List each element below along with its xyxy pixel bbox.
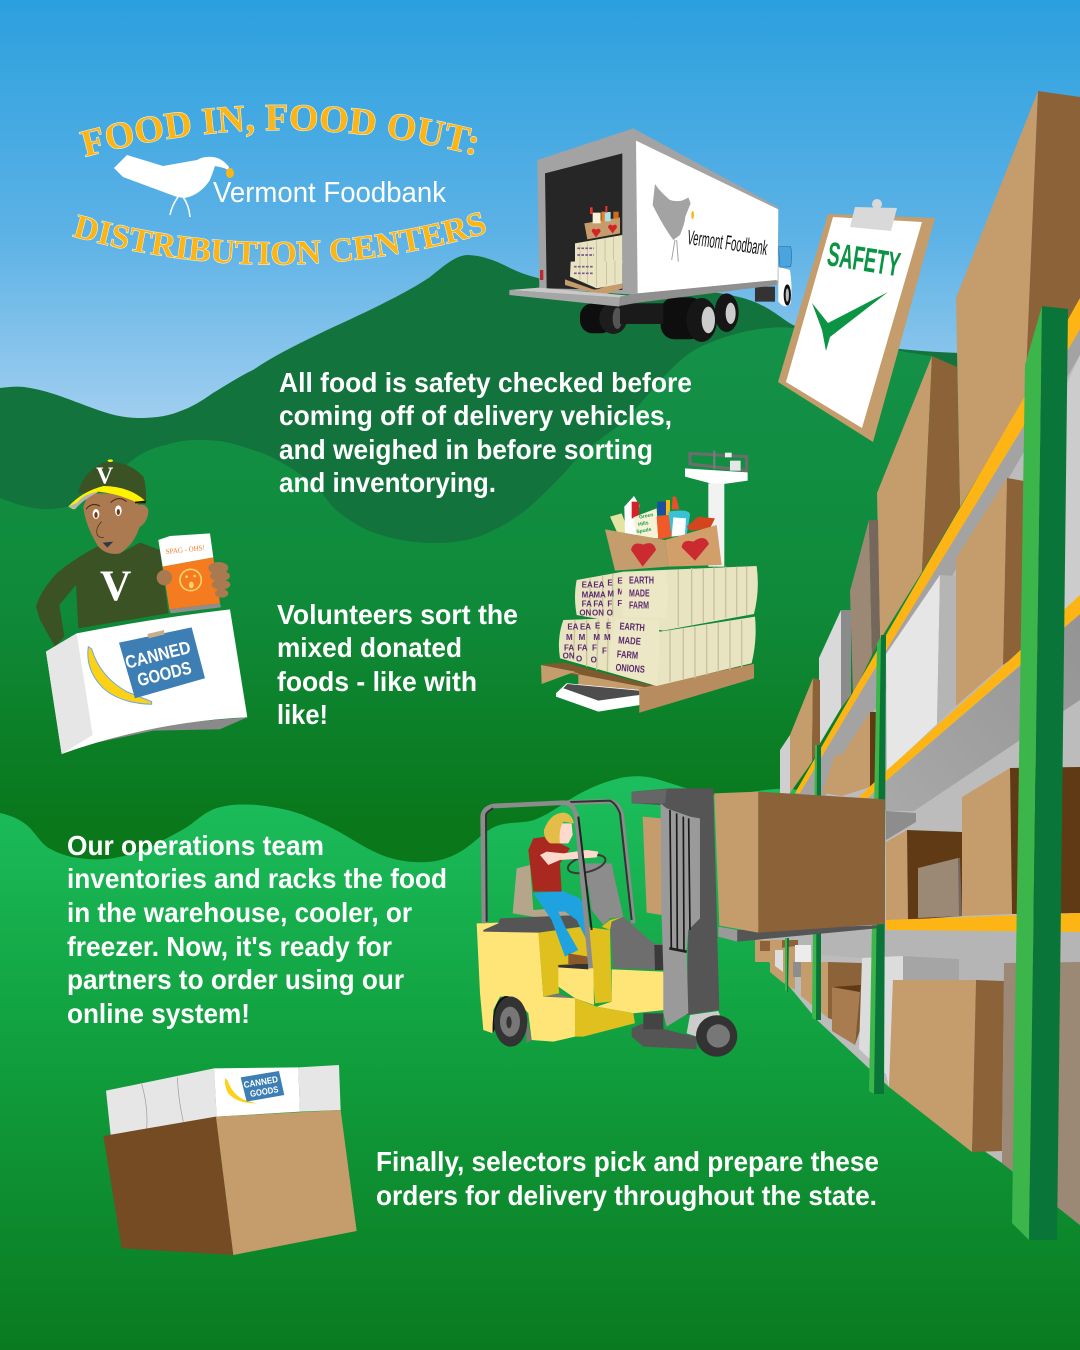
delivery truck: Vermont Foodbank: [686, 226, 769, 260]
sacks lower stack: EA: [567, 622, 579, 631]
big tan box level two: [962, 767, 1080, 916]
canned goods label: GOODS: [135, 658, 193, 690]
sacks lower stack: MADE: [618, 635, 641, 648]
pallet: [541, 663, 754, 713]
paragraph: operations team: inventories and racks the food: [67, 863, 447, 894]
sacks upper stack: FA: [582, 600, 592, 609]
sacks upper stack: F: [617, 599, 622, 608]
pallet in truck: [565, 206, 622, 298]
box with hearts: [605, 525, 722, 571]
paragraph: volunteers sort: like!: [277, 699, 328, 730]
sacks lower stack: F: [602, 646, 607, 655]
sacks upper stack: EA: [582, 580, 593, 589]
paragraph: volunteers sort: Volunteers sort the: [277, 599, 518, 630]
paragraph: safety checks: [279, 367, 692, 498]
bottom canned goods carton: [103, 1065, 357, 1255]
delivery truck: [509, 128, 792, 342]
sacks lower stack: M: [593, 633, 600, 642]
sacks lower stack: M: [566, 633, 573, 642]
background: sky: [0, 0, 1080, 430]
can of Spag-Ohs: [158, 533, 221, 613]
mid box upper: [877, 356, 960, 640]
rack wall: [755, 329, 1080, 1225]
steering wheel: [566, 851, 607, 877]
paragraph: operations team: freezer. Now, it's ready for: [67, 931, 392, 962]
lower yellow beam: [858, 595, 1080, 798]
base and front wheel: [632, 1011, 737, 1057]
cargo box: [537, 128, 778, 295]
paragraph: safety checks: and weighed in before sorting: [279, 434, 653, 465]
logo: Vermont Foodbank bird: Vermont Foodbank: [213, 177, 446, 209]
tall box upper right: [956, 91, 1080, 507]
white panel floor level: [859, 956, 959, 1087]
box with open side: [886, 830, 962, 920]
rear wheel: [493, 996, 532, 1047]
volunteer with canned goods box: [36, 459, 247, 754]
sacks lower stack: FARM: [616, 649, 638, 662]
roll cage: [483, 801, 633, 968]
small white box: [819, 610, 851, 745]
far tan box: [790, 678, 820, 793]
paragraph: operations team: in the warehouse, cooler, or: [67, 897, 412, 928]
hood: [602, 917, 670, 970]
grey-brown box upper: [850, 520, 880, 695]
sacks lower stack: EARTH: [619, 621, 645, 634]
small label: CANNED: [243, 1074, 279, 1090]
word: SAFETY: SAFETY: [825, 235, 903, 284]
paragraph: selectors: orders for delivery throughout the state.: [376, 1180, 877, 1211]
sacks upper stack: O: [607, 608, 613, 617]
seat base: [483, 915, 580, 933]
small label: GOODS: [249, 1084, 279, 1099]
paragraph: operations team: partners to order using our: [67, 964, 404, 995]
sacks upper stack: M: [617, 588, 624, 597]
small tan boxes: [822, 712, 877, 796]
sacks lower stack: E: [595, 621, 601, 630]
bottom yellow beam: [886, 913, 1080, 932]
food in box: [610, 496, 715, 539]
paragraph: safety checks: All food is safety checked before: [279, 367, 692, 398]
face details: [86, 499, 127, 548]
lower grey beam band: [860, 614, 1080, 811]
wheels: [580, 287, 775, 342]
canned goods label: [119, 627, 205, 698]
sacks upper stack: EARTH: [629, 575, 654, 586]
box behind mast: [643, 817, 662, 915]
head: [83, 493, 148, 554]
upper grey beam band: [795, 329, 1080, 801]
paragraph: operations team: online system!: [67, 998, 250, 1029]
shirt: [36, 543, 168, 647]
white carton: [46, 609, 247, 754]
sacks lower stack: ON: [563, 652, 575, 661]
carried box and forks: [714, 792, 885, 942]
title line one: FOOD IN, FOOD OUT:: [78, 104, 478, 158]
sacks upper stack: FA: [593, 600, 604, 609]
paragraph: volunteers sort: [277, 599, 518, 730]
rack posts: [785, 635, 886, 1094]
clipboard clip: [850, 199, 897, 231]
sacks lower stack: M: [604, 633, 611, 642]
driver: [528, 813, 598, 964]
mast: [632, 788, 719, 1027]
food in box: Green: [639, 512, 654, 521]
sacks lower stack: [559, 617, 756, 686]
large front post: [1012, 306, 1068, 1240]
hands: [157, 562, 230, 598]
sacks lower stack: O: [576, 655, 582, 664]
paragraph: operations team: [67, 830, 447, 1029]
paragraph: selectors: Finally, selectors pick and prepare these: [376, 1146, 879, 1177]
yellow body: [477, 923, 665, 1042]
paragraph: safety checks: and inventorying.: [279, 467, 496, 498]
paragraph: operations team: Our operations team: [67, 830, 324, 861]
sacks upper stack: F: [607, 600, 612, 609]
tan box level one: [956, 478, 1024, 706]
scale post: [685, 451, 748, 567]
sacks lower stack: ONIONS: [615, 663, 645, 676]
open carton, floor level: [801, 962, 862, 1045]
big tan box floor level: [889, 980, 1004, 1152]
warehouse racking: [755, 91, 1080, 1240]
banana: [88, 647, 152, 704]
truck logo: [653, 184, 769, 262]
title line two: DISTRIBUTION CENTERS: [72, 212, 486, 266]
paragraph: selectors: [376, 1146, 879, 1211]
sacks lower stack: O: [591, 656, 597, 665]
sacks upper stack: [575, 566, 758, 631]
pallet of onion sacks on scale: [541, 451, 758, 713]
lower wall strip: [755, 930, 1080, 981]
canned goods label: CANNED: [123, 637, 193, 673]
paragraph: volunteers sort: foods - like with: [277, 666, 477, 697]
green check mark: [812, 292, 888, 351]
title: Food In, Food Out: Distribution Centers: [72, 104, 486, 266]
sacks upper stack: E: [607, 578, 613, 587]
liftgate: [509, 280, 777, 307]
cab: [778, 247, 792, 306]
far small boxes: [755, 940, 811, 990]
steering column: [580, 863, 623, 925]
volunteer with canned goods box: V: [100, 562, 131, 610]
sacks upper stack: EA: [593, 580, 605, 589]
grey-brown box floor level: [1002, 962, 1080, 1225]
cap: [68, 459, 146, 509]
sacks upper stack: MADE: [629, 589, 650, 600]
can of Spag-Ohs: SPAG - OHS!: [165, 543, 205, 556]
light grey box middle level: [886, 575, 956, 771]
seat: [513, 865, 578, 918]
sacks upper stack: ON: [579, 608, 592, 617]
sacks lower stack: EA: [580, 622, 591, 631]
sacks upper stack: FARM: [629, 601, 649, 612]
sacks lower stack: M: [579, 633, 586, 642]
small banana: [225, 1078, 257, 1103]
small label: [241, 1071, 284, 1102]
far grey box: [780, 735, 790, 795]
sacks upper stack: ON: [592, 608, 604, 617]
sacks lower stack: F: [592, 644, 597, 653]
sacks upper stack: MA: [582, 591, 594, 600]
upper yellow beam: [795, 298, 1080, 793]
food in box: Spuds: [636, 527, 652, 535]
sacks lower stack: FA: [577, 644, 588, 653]
sacks upper stack: M: [607, 590, 614, 599]
light wall panel right: [1060, 355, 1080, 620]
sacks lower stack: FA: [564, 644, 574, 653]
sacks upper stack: E: [617, 576, 623, 585]
logo: Vermont Foodbank bird: [114, 155, 446, 217]
food in box: Hills: [638, 520, 649, 528]
sacks upper stack: MA: [593, 591, 606, 600]
forklift with driver and box: [477, 788, 885, 1057]
sacks lower stack: E: [606, 621, 612, 630]
paragraph: volunteers sort: mixed donated: [277, 632, 462, 663]
paragraph: safety checks: coming off of delivery vehicles,: [279, 400, 672, 431]
level 2 rear plate: [886, 811, 916, 840]
cap: V: [96, 463, 114, 489]
safety clipboard: [778, 199, 935, 442]
